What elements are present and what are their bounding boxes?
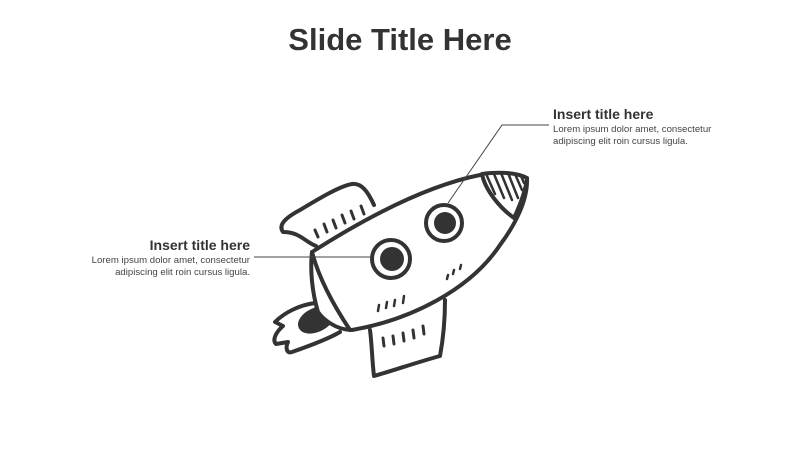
icon: bottom fin	[370, 300, 445, 376]
icon: window upper	[426, 205, 462, 241]
connector: left	[254, 256, 372, 258]
title: Slide Title Here	[288, 22, 512, 57]
icon: top fin	[281, 184, 374, 246]
connector: right	[448, 125, 549, 203]
icon: body marks	[378, 265, 461, 311]
callout: left: Lorem ipsum dolor amet, consectetur	[92, 255, 250, 266]
icon: flame	[274, 303, 340, 352]
callout: right	[553, 106, 712, 147]
callout: left	[92, 237, 250, 278]
icon: window lower	[372, 240, 410, 278]
icon: rocket body	[311, 173, 527, 330]
callout: left: Insert title here	[150, 237, 250, 253]
callout: right: Insert title here	[553, 106, 653, 122]
icon: nose hatch	[482, 173, 527, 218]
callout: right: Lorem ipsum dolor amet, consectetur	[553, 124, 711, 135]
callout: right: adipiscing elit roin cursus ligula.	[553, 136, 688, 147]
callout: left: adipiscing elit roin cursus ligula.	[115, 267, 250, 278]
